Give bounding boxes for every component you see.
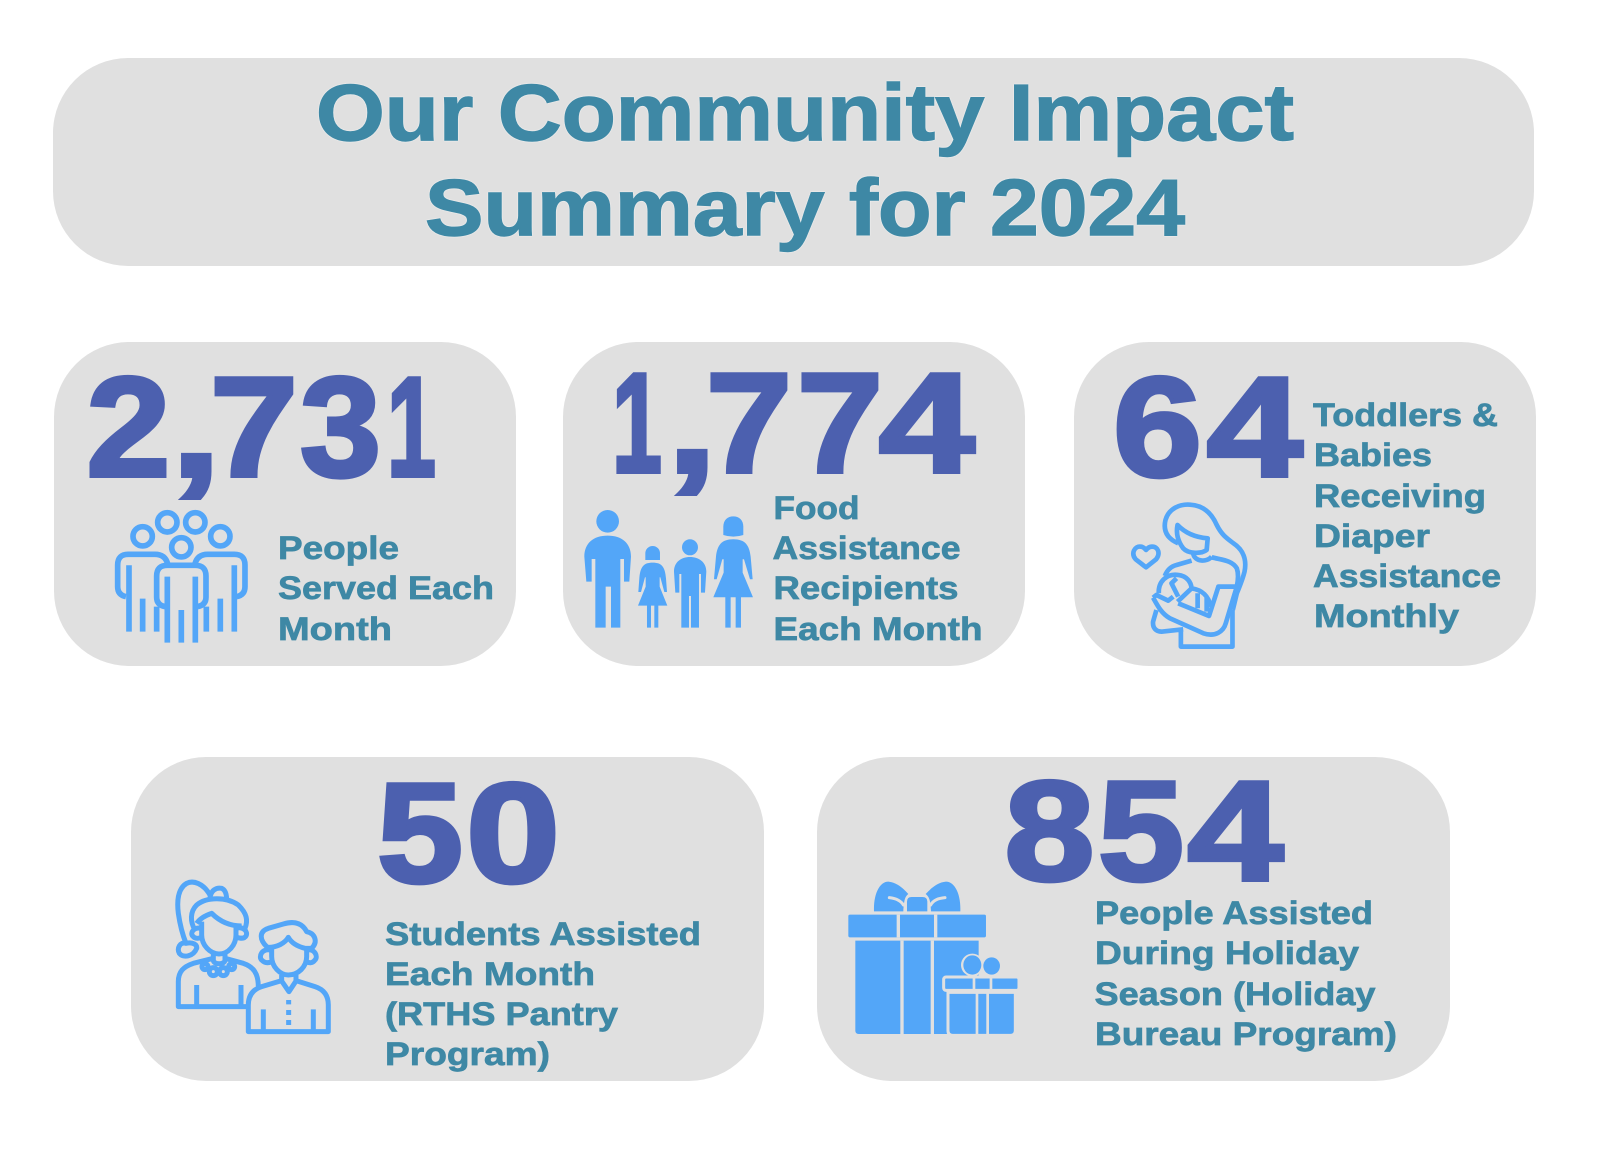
icon: mother holding baby <box>1133 505 1245 647</box>
stat: 1,774: , <box>667 344 717 503</box>
stat: 2,731: 3 <box>300 348 381 507</box>
label: toddlers and babies receiving diaper assistance monthly: Monthly <box>1314 598 1459 634</box>
label: people served each month: People <box>278 530 399 566</box>
stat: 854: 5 <box>1098 752 1184 911</box>
stat: 50: 5 <box>377 754 463 913</box>
label: toddlers and babies receiving diaper assistance monthly: Assistance <box>1313 558 1501 594</box>
stat: 50: 0 <box>466 754 560 913</box>
label: students assisted each month <box>385 916 701 1072</box>
title banner <box>53 58 1534 266</box>
stat: 1,774: 7 <box>797 344 883 503</box>
label: people served each month: Month <box>278 611 392 647</box>
stat: 2,731: 7 <box>210 348 298 507</box>
stat: 2,731: 2 <box>86 348 170 507</box>
stat: 64: 4 <box>1207 348 1303 507</box>
stat: 854: 4 <box>1187 752 1283 911</box>
panel: holiday assistance <box>817 752 1450 1081</box>
label: people assisted during holiday season <box>1094 895 1397 1052</box>
label: toddlers and babies receiving diaper assistance monthly: Receiving <box>1314 478 1486 514</box>
title text <box>316 68 1294 252</box>
label: toddlers and babies receiving diaper assistance monthly <box>1313 397 1501 634</box>
label: people assisted during holiday season: During Holiday <box>1095 935 1359 971</box>
label: toddlers and babies receiving diaper assistance monthly: Diaper <box>1314 518 1430 554</box>
label: students assisted each month: Program) <box>385 1036 550 1072</box>
panel: people served <box>54 342 516 666</box>
label: food assistance recipients each month: Each Month <box>774 611 982 647</box>
label: toddlers and babies receiving diaper assistance monthly: Toddlers & <box>1313 397 1498 433</box>
icon: two students <box>178 882 328 1032</box>
label: toddlers and babies receiving diaper assistance monthly: Babies <box>1314 437 1432 473</box>
title text: Summary for 2024 <box>425 163 1186 252</box>
label: people assisted during holiday season: People Assisted <box>1095 895 1373 931</box>
label: people served each month <box>278 530 494 647</box>
stat: 2,731: , <box>171 348 221 507</box>
label: students assisted each month: Each Month <box>385 956 595 992</box>
panel: food assistance <box>563 342 1025 666</box>
label: people served each month: Served Each <box>278 570 494 606</box>
label: food assistance recipients each month: Food <box>774 490 860 526</box>
label: food assistance recipients each month <box>772 490 982 647</box>
stat: 1,774: 1 <box>612 344 662 503</box>
icon: group of people <box>118 513 245 643</box>
stat: 854: 8 <box>1004 752 1094 911</box>
stat: 64: 6 <box>1113 348 1202 507</box>
label: food assistance recipients each month: Recipients <box>774 570 958 606</box>
stat: 2,731: 1 <box>387 348 436 507</box>
label: food assistance recipients each month: Assistance <box>772 530 960 566</box>
label: students assisted each month: (RTHS Pantry <box>385 996 618 1032</box>
icon: family silhouettes <box>584 510 753 628</box>
label: people assisted during holiday season: Season (Holiday <box>1094 976 1376 1012</box>
icon: gift boxes <box>848 882 1019 1035</box>
stat: 1,774: 4 <box>879 344 975 503</box>
title text: Our Community Impact <box>316 68 1294 157</box>
panel: students assisted <box>131 754 764 1081</box>
label: people assisted during holiday season: Bureau Program) <box>1095 1016 1397 1052</box>
panel: diaper assistance <box>1074 342 1536 666</box>
stat: 1,774: 7 <box>706 344 792 503</box>
label: students assisted each month: Students Assisted <box>385 916 701 952</box>
